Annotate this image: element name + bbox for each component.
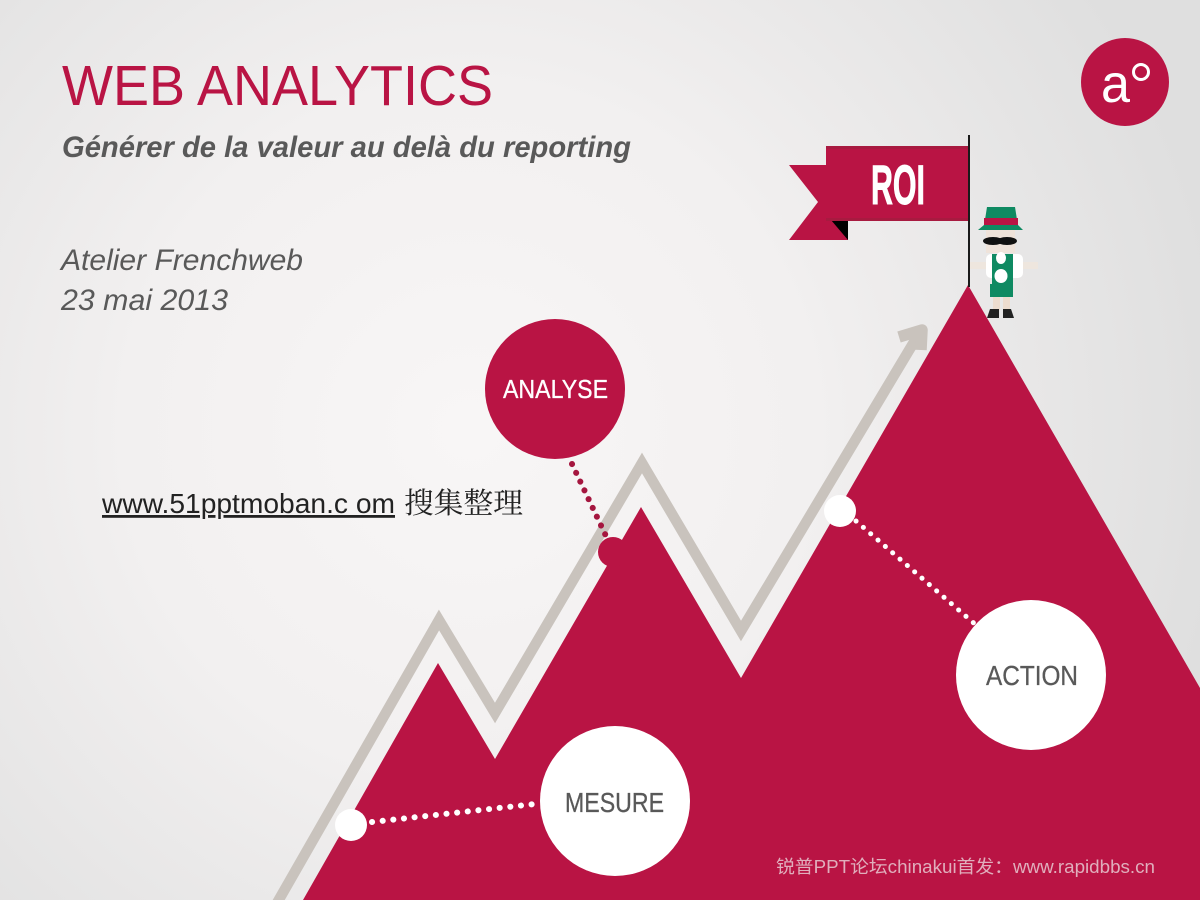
website note [101, 481, 523, 522]
event and date [59, 244, 303, 317]
circle: mesure: MESURE [565, 787, 664, 818]
mountains [303, 285, 1200, 900]
node: action [824, 495, 856, 527]
circle: analyse: ANALYSE [503, 374, 608, 404]
connector: analyse [572, 464, 606, 536]
flag pole [968, 135, 970, 287]
flag label: ROI [871, 153, 925, 216]
circle: action [956, 600, 1106, 750]
title: WEB ANALYTICS [62, 54, 493, 118]
website note: 搜集整理 [404, 481, 523, 522]
logo [1081, 38, 1169, 126]
logo: a [1101, 54, 1131, 114]
circle: action: ACTION [986, 660, 1078, 691]
website note: www.51pptmoban.c om [101, 488, 395, 519]
flag [789, 146, 969, 240]
connector: action [856, 521, 976, 625]
connector: mesure [372, 804, 535, 822]
footer credit: 锐普PPT论坛chinakui首发：www.rapidbbs.cn [776, 857, 1155, 877]
icon: hiker character [970, 207, 1038, 318]
circle: mesure [540, 726, 690, 876]
arrow: growth path [277, 330, 922, 900]
circle: analyse [485, 319, 625, 459]
event and date: 23 mai 2013 [60, 284, 228, 317]
node: mesure [335, 809, 367, 841]
event and date: Atelier Frenchweb [59, 244, 303, 277]
node: analyse [598, 537, 628, 567]
subtitle: Générer de la valeur au delà du reporting [62, 131, 631, 164]
